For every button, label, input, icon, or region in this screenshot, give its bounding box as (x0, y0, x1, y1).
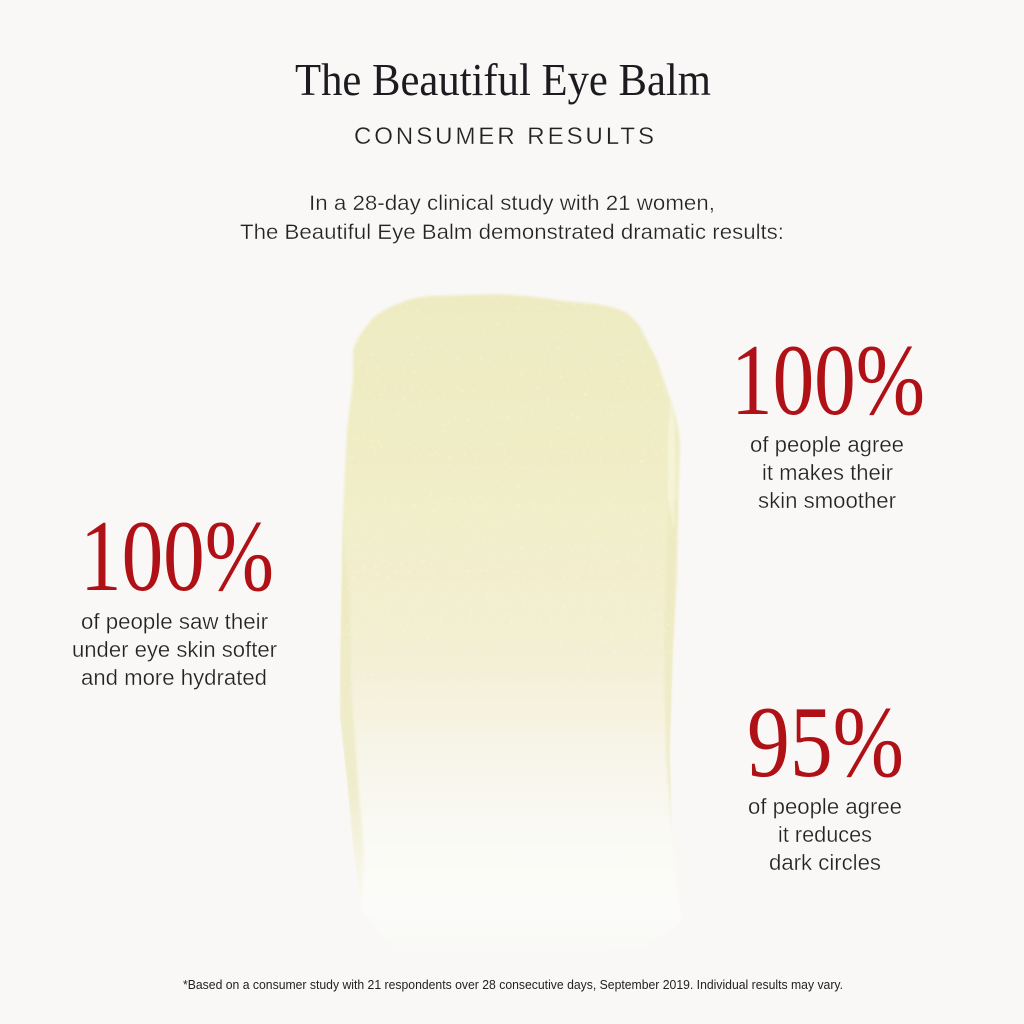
intro text (240, 192, 784, 244)
stat caption: dark circles (748, 794, 902, 875)
stat: 95%: 95% (747, 686, 904, 799)
stat: 100% smoother (731, 324, 925, 513)
stat: 100% softer (72, 500, 277, 690)
subtitle: CONSUMER RESULTS (354, 123, 654, 150)
stat caption: smoother: it makes their (762, 460, 893, 485)
stat caption: dark circles: it reduces (778, 822, 872, 847)
stat caption: smoother (750, 432, 904, 513)
intro text: The Beautiful Eye Balm demonstrated dramatic results: (240, 221, 784, 244)
stat caption: softer: of people saw their (81, 609, 268, 634)
stat: 100% smoother: 100% (731, 324, 925, 437)
stat caption: softer (72, 609, 277, 690)
title: The Beautiful Eye Balm (295, 54, 711, 105)
stat caption: smoother: of people agree (750, 432, 904, 457)
stat: 100% softer: 100% (80, 500, 274, 613)
intro text: In a 28-day clinical study with 21 women, (309, 192, 715, 215)
footnote: *Based on a consumer study with 21 respondents over 28 consecutive days, September 2019. Individual results may vary. (183, 978, 843, 992)
stat caption: softer: under eye skin softer (72, 637, 277, 662)
stat caption: softer: and more hydrated (81, 665, 267, 690)
stat caption: dark circles: dark circles (769, 850, 881, 875)
stat: 95% (747, 686, 904, 875)
balm swatch (340, 293, 681, 884)
stat caption: dark circles: of people agree (748, 794, 902, 819)
stat caption: smoother: skin smoother (758, 488, 896, 513)
